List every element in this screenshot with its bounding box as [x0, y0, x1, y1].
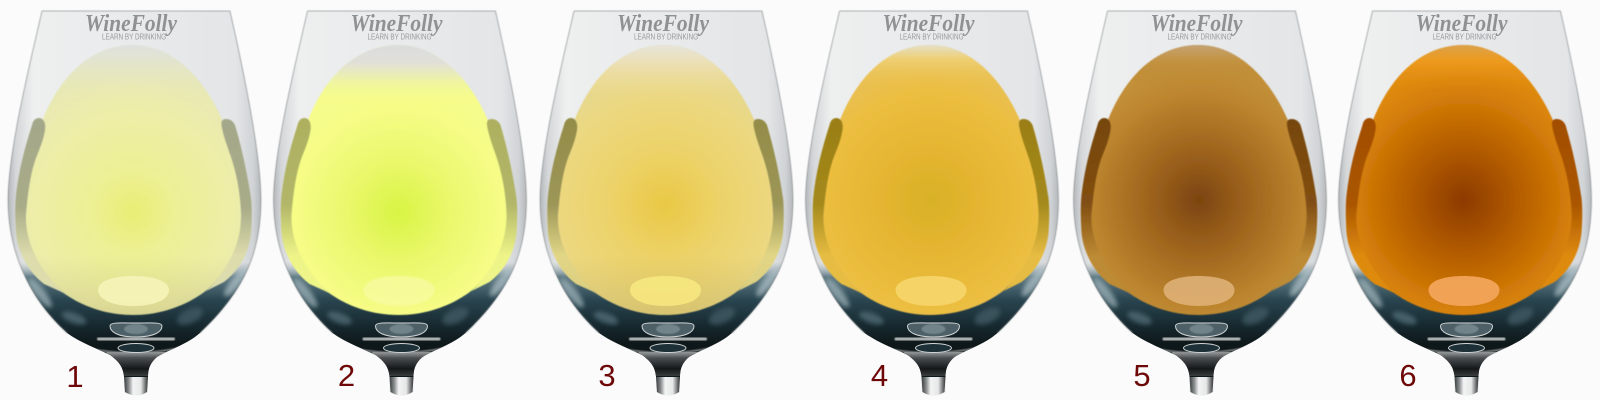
highlight 3	[630, 276, 701, 306]
number 2: 2	[338, 358, 355, 393]
logo 6: WineFolly	[1416, 11, 1508, 37]
glass 6: orange amber	[1336, 11, 1596, 396]
wine 4	[822, 45, 1040, 315]
wine 3	[557, 45, 774, 315]
glass 5: brown amber	[1072, 11, 1332, 396]
wine 1	[25, 45, 242, 315]
tears 6	[1346, 118, 1582, 293]
highlight 2	[364, 276, 434, 306]
tears 3	[547, 118, 784, 293]
logo 5: LEARN BY DRINKING	[1168, 32, 1232, 42]
logo 5: WineFolly	[1150, 11, 1243, 37]
wine 2	[290, 45, 508, 315]
logo 4: LEARN BY DRINKING	[900, 32, 964, 42]
glass 3: pale gold	[538, 11, 798, 396]
tears 1	[15, 118, 252, 293]
tears 2	[281, 118, 517, 293]
logo 3: WineFolly	[617, 11, 709, 37]
tears 4	[813, 118, 1049, 293]
highlight 1	[98, 276, 169, 306]
highlight 6	[1428, 276, 1500, 306]
number 1: 1	[66, 359, 84, 394]
number 4: 4	[871, 358, 888, 393]
glass 2: bright lime yellow	[272, 11, 532, 396]
number 5: 5	[1133, 358, 1151, 393]
tears 5	[1081, 118, 1317, 293]
number 3: 3	[598, 358, 616, 393]
logo 4: WineFolly	[882, 11, 975, 37]
wine 6	[1356, 45, 1572, 315]
logo 6: LEARN BY DRINKING	[1432, 32, 1496, 42]
highlight 4	[896, 276, 966, 306]
logo 2: LEARN BY DRINKING	[368, 32, 432, 42]
highlight 5	[1164, 276, 1234, 306]
logo 3: LEARN BY DRINKING	[634, 32, 698, 42]
logo 2: WineFolly	[350, 11, 443, 37]
glass 1: palest straw	[6, 11, 266, 396]
wine 5	[1090, 45, 1308, 315]
logo 1: LEARN BY DRINKING	[102, 32, 166, 42]
logo 1: WineFolly	[85, 11, 177, 37]
number 6: 6	[1399, 358, 1417, 393]
glass 4: deep gold	[804, 11, 1064, 396]
